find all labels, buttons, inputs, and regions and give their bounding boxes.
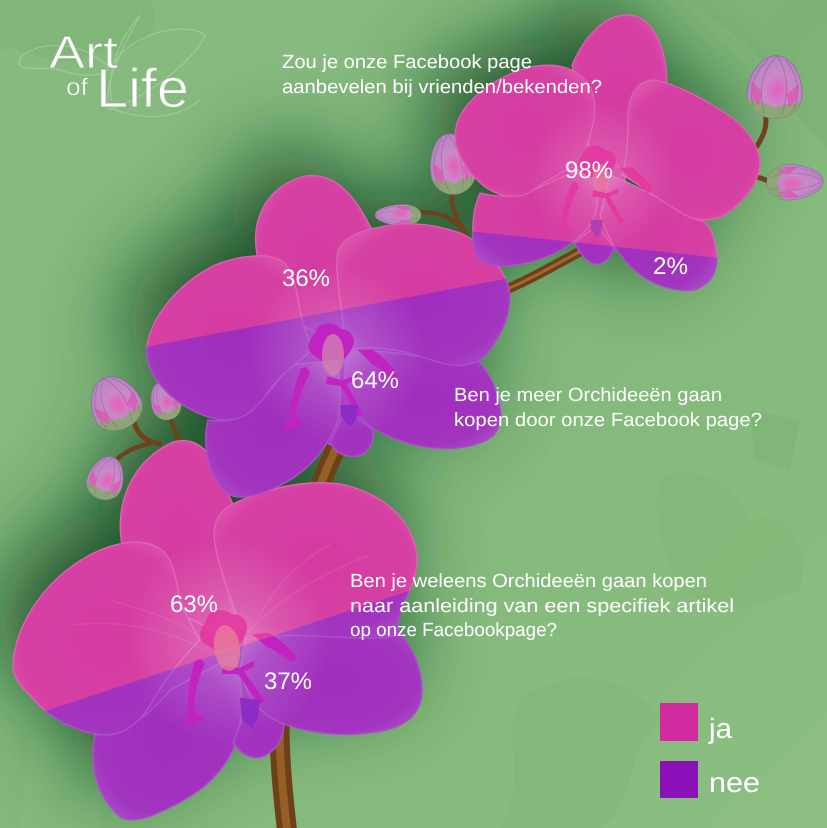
question 1: aanbevelen bij vrienden/bekenden?	[282, 77, 602, 98]
question 3	[350, 571, 734, 641]
stems	[115, 113, 772, 828]
flower middle: 36% ja, 64% nee	[147, 176, 510, 497]
question 1	[282, 52, 602, 98]
legend	[660, 703, 760, 798]
logo: Art of Life: Life	[96, 57, 189, 119]
question 3: Ben je weleens Orchideeën gaan kopen	[350, 571, 707, 592]
flower top: 98% ja, 2% nee	[455, 15, 760, 290]
logo: Art of Life: of	[66, 74, 88, 101]
flower bottom: 63% ja, 37% nee	[13, 441, 422, 820]
value 64%: 64%	[351, 367, 399, 394]
question 2	[454, 385, 762, 431]
question 3: naar aanleiding van een specifiek artikel	[350, 596, 734, 617]
question 2: kopen door onze Facebook page?	[454, 410, 762, 431]
legend: nee	[709, 767, 760, 798]
value 37%: 37%	[264, 668, 312, 695]
value 36%: 36%	[282, 265, 330, 292]
legend: ja	[708, 713, 732, 744]
logo: Art of Life: Art	[49, 26, 118, 78]
buds	[81, 54, 824, 504]
value 2%: 2%	[653, 253, 688, 280]
value 98%: 98%	[565, 157, 613, 184]
logo: Art of Life	[19, 15, 205, 119]
question 3: op onze Facebookpage?	[350, 620, 557, 641]
question 2: Ben je meer Orchideeën gaan	[454, 385, 722, 406]
value 63%: 63%	[170, 591, 218, 618]
question 1: Zou je onze Facebook page	[282, 52, 532, 73]
